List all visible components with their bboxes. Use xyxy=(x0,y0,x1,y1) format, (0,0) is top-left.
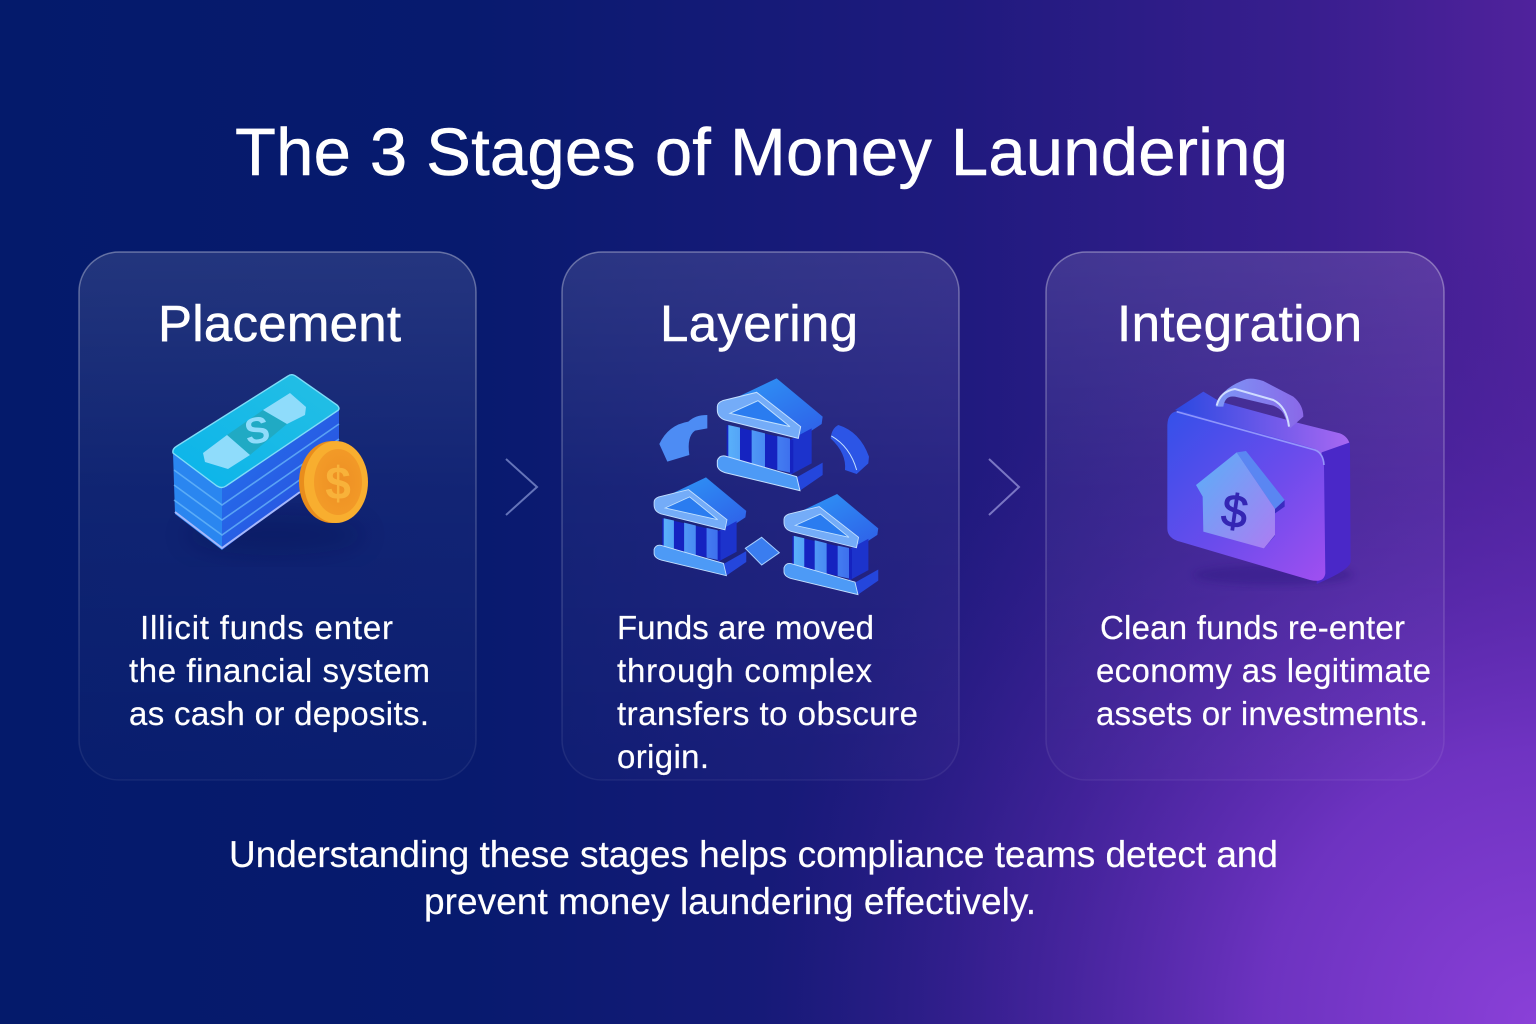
heading: placement: Placement xyxy=(158,295,401,352)
title: The 3 Stages of Money Laundering xyxy=(235,115,1288,190)
text: layering description: through complex xyxy=(617,652,872,689)
text: placement description: the financial system xyxy=(129,652,430,689)
text: layering description xyxy=(617,609,918,775)
text: layering description: transfers to obscure xyxy=(617,695,918,732)
heading: integration: Integration xyxy=(1117,295,1362,352)
text: integration description xyxy=(1096,609,1431,732)
text: placement description xyxy=(129,609,430,732)
icon: three banks with arrows xyxy=(654,378,878,595)
icon: right arrow xyxy=(831,425,869,474)
arrow: placement to layering xyxy=(506,459,537,515)
icon: cash stack and coin xyxy=(173,375,368,555)
heading: layering: Layering xyxy=(660,295,858,352)
text: integration description: economy as legitimate xyxy=(1096,652,1431,689)
text: integration description: assets or investments. xyxy=(1096,695,1428,732)
icon: briefcase with house xyxy=(1167,379,1353,585)
panel: layering xyxy=(562,252,959,780)
panel: placement xyxy=(79,252,476,780)
text: integration description: Clean funds re-enter xyxy=(1100,609,1405,646)
panel: integration xyxy=(1046,252,1444,780)
icon: small block xyxy=(745,537,779,565)
footer text xyxy=(229,834,1278,922)
text: layering description: origin. xyxy=(617,738,709,775)
footer text: prevent money laundering effectively. xyxy=(424,881,1036,922)
icon: left arrow xyxy=(659,415,707,462)
text: layering description: Funds are moved xyxy=(617,609,874,646)
footer text: Understanding these stages helps compliance teams detect and xyxy=(229,834,1278,875)
icon: cash stack and coin: S xyxy=(241,408,273,453)
text: placement description: Illicit funds enter xyxy=(140,609,393,646)
arrow: layering to integration xyxy=(989,459,1019,515)
icon: cash stack and coin: $ xyxy=(325,457,351,509)
icon: briefcase with house: $ xyxy=(1218,483,1251,539)
text: placement description: as cash or deposits. xyxy=(129,695,429,732)
